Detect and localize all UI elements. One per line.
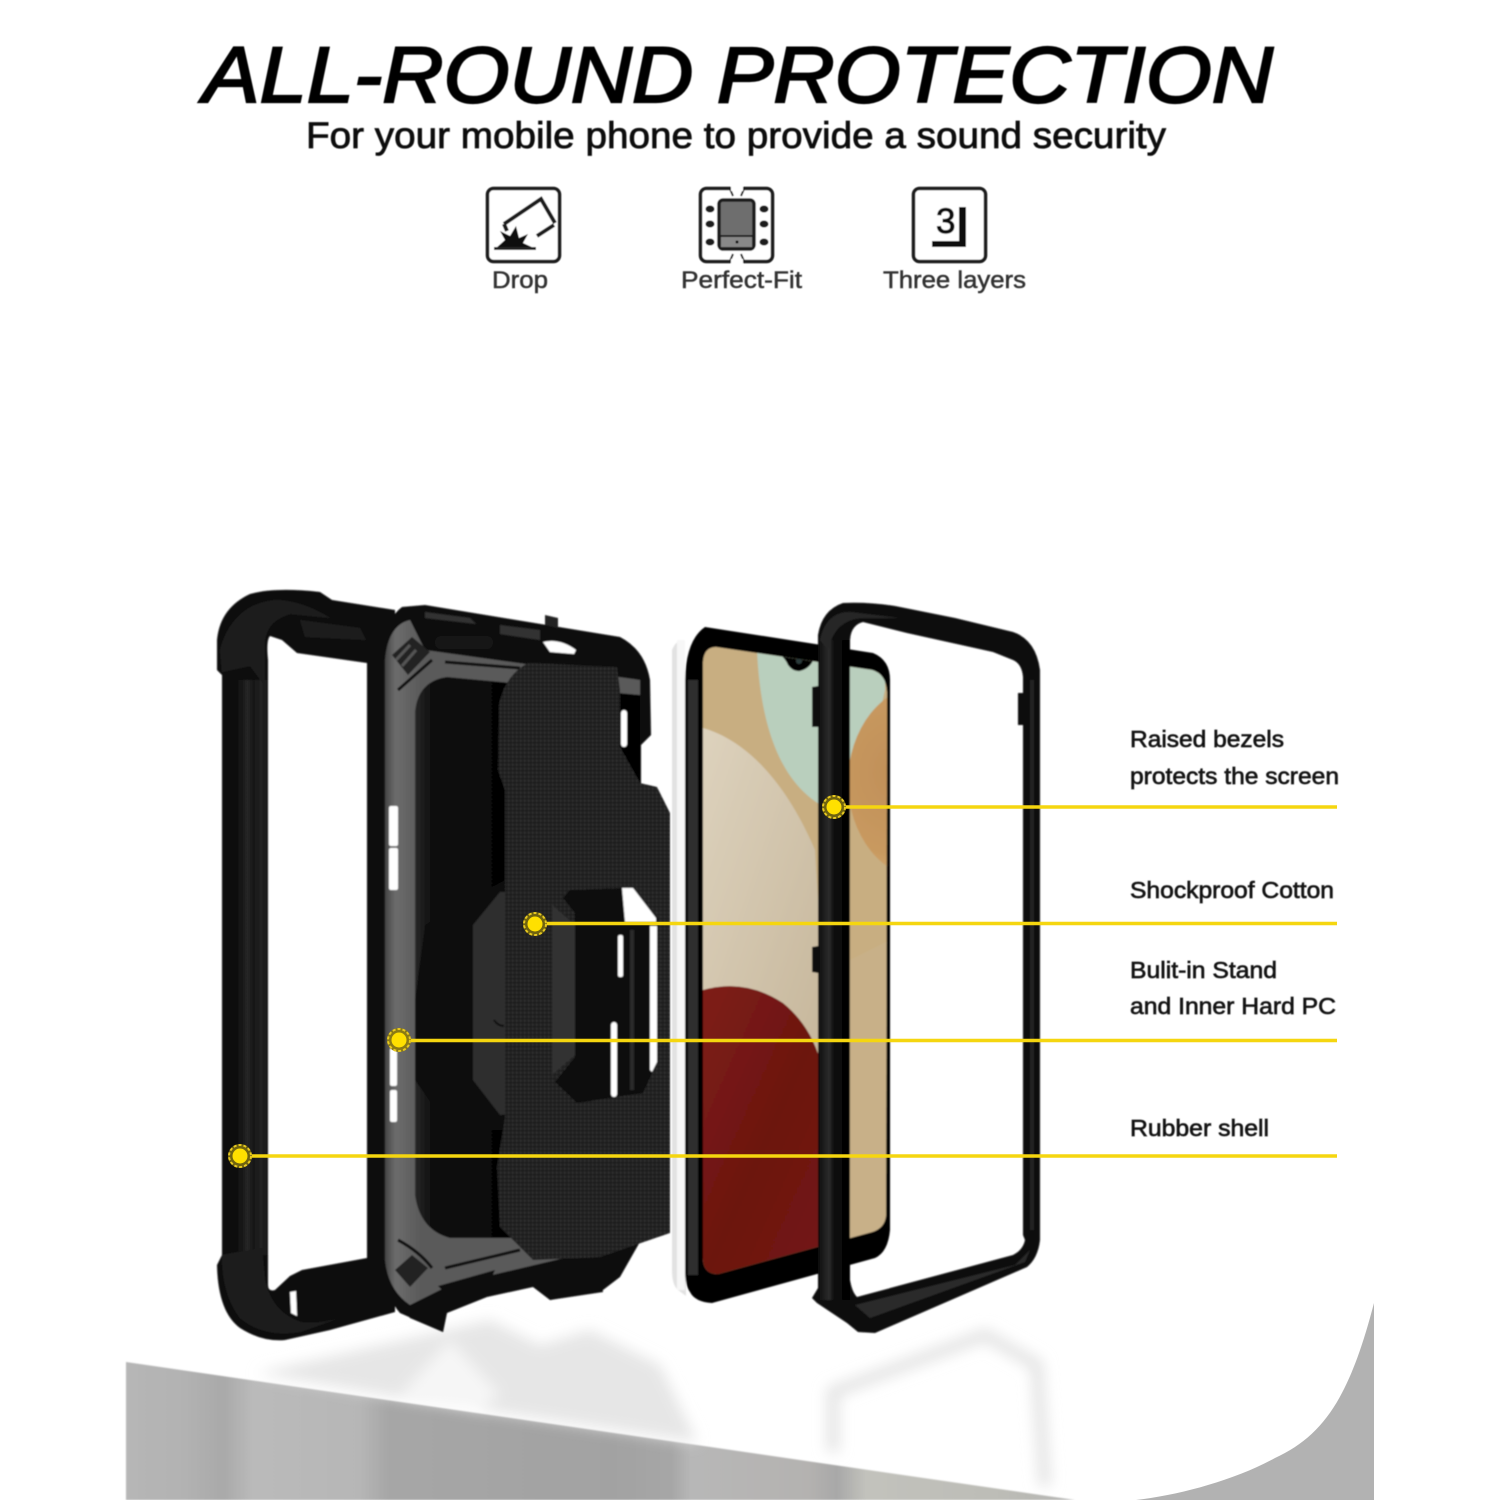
label: built-in stand: [1130, 957, 1336, 1019]
inner hard PC frame: [384, 605, 651, 1332]
label: built-in stand: and Inner Hard PC: [1130, 993, 1336, 1019]
callout labels: [1130, 726, 1339, 1141]
label: raised bezels: [1130, 726, 1339, 789]
subtitle: For your mobile phone to provide a sound security: [306, 115, 1167, 156]
leader: raised bezels: [845, 805, 1337, 809]
panel: floor surface: [126, 1303, 1374, 1500]
icon: drop: [488, 188, 560, 262]
leader: rubber shell: [250, 1154, 1337, 1158]
label: rubber shell: Rubber shell: [1130, 1115, 1269, 1141]
label: built-in stand: Bulit-in Stand: [1130, 957, 1277, 983]
leader: stand and inner hard PC: [410, 1039, 1337, 1042]
feature icons row: [488, 186, 1026, 294]
marker: shockproof cotton: [523, 912, 547, 936]
icon: three layers: 3: [936, 202, 955, 241]
icon label: Drop: Drop: [492, 267, 548, 294]
callout leader lines: [250, 807, 1337, 1156]
marker: rubber shell: [228, 1144, 252, 1168]
marker: stand and inner hard PC: [387, 1028, 411, 1052]
label: raised bezels: Raised bezels: [1130, 726, 1284, 752]
floor shadows of the case parts: [257, 1320, 1045, 1486]
exploded phone case illustration: [217, 590, 1040, 1340]
icon label: Three layers: Three layers: [883, 267, 1026, 294]
foam cutout with stand detail: [494, 888, 658, 1103]
rubber shell: [217, 590, 395, 1340]
phone: [672, 626, 892, 1304]
label: shockproof cotton: Shockproof Cotton: [1130, 877, 1334, 903]
icon: three layers: [914, 188, 986, 262]
leader: shockproof cotton: [546, 922, 1337, 925]
side button openings: [389, 710, 627, 1122]
icon label: Perfect-Fit: Perfect-Fit: [681, 267, 802, 294]
icon: perfect fit: [700, 186, 772, 264]
marker: raised bezels: [822, 795, 846, 819]
opening in rubber shell: [290, 1291, 297, 1316]
phone screen wallpaper: [702, 646, 888, 1276]
title: ALL-ROUND PROTECTION: [199, 30, 1274, 119]
shockproof cotton foam: [497, 663, 670, 1260]
label: raised bezels: protects the screen: [1130, 763, 1339, 789]
callout markers: [228, 795, 846, 1168]
raised bezel frame: [812, 603, 1040, 1333]
corner vents and slots: [392, 612, 603, 1332]
built-in stand: [473, 892, 660, 1115]
